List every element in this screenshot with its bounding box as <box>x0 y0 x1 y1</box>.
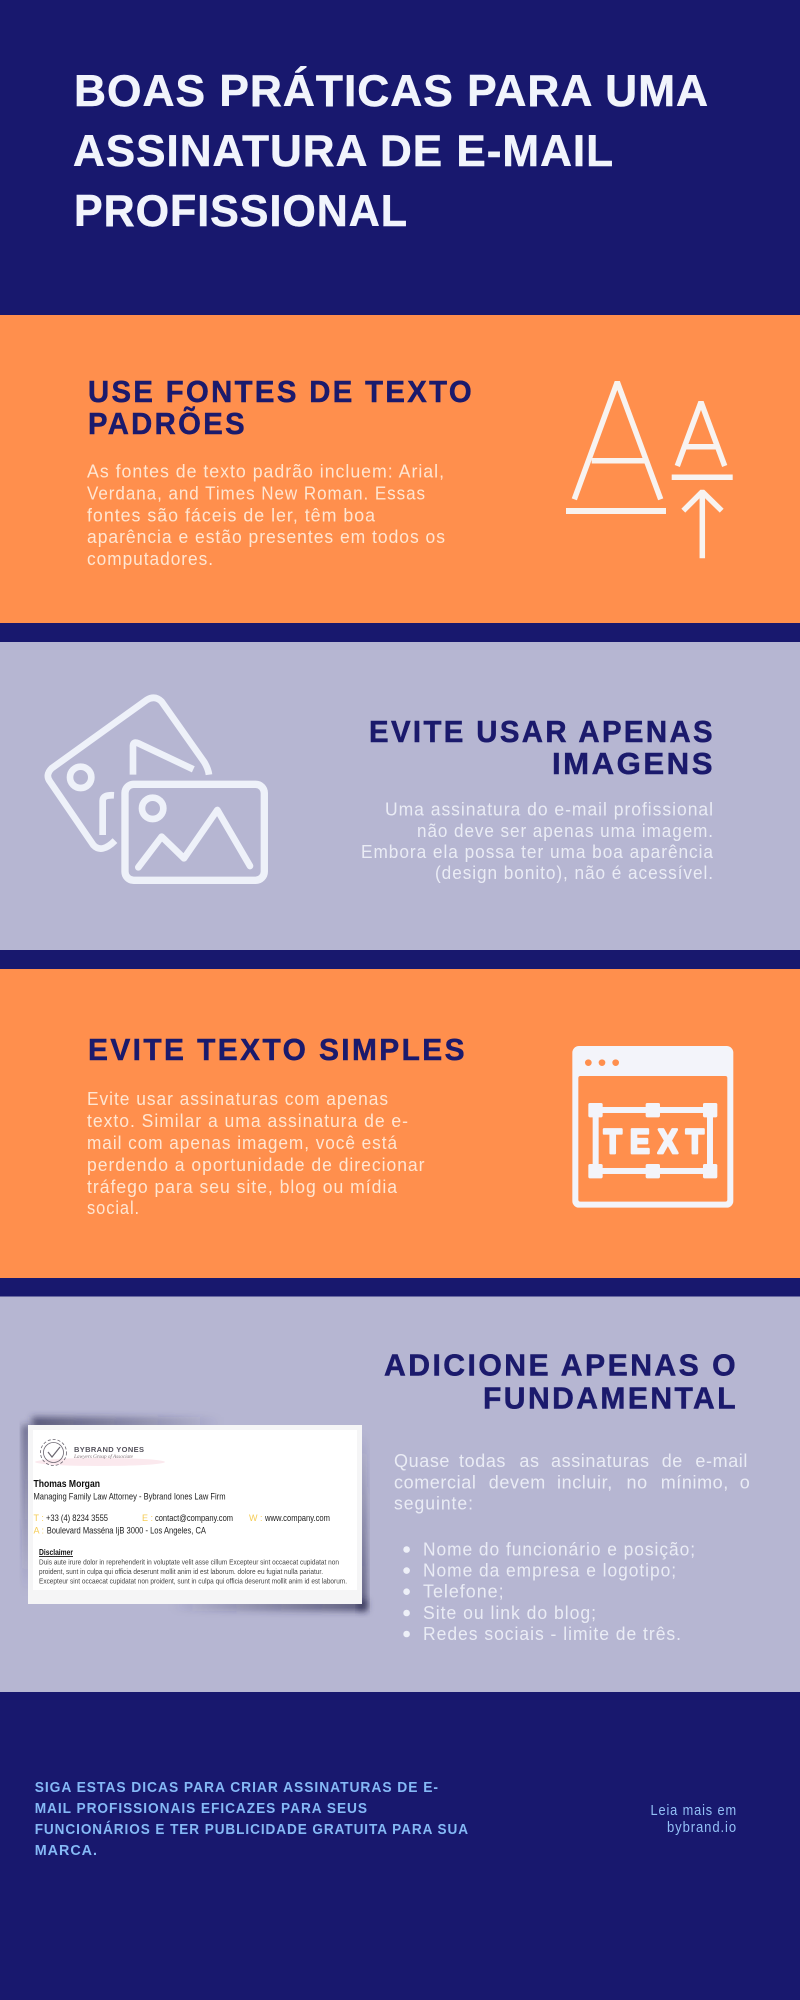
footer call to action: MARCA. <box>35 1843 98 1859</box>
text block: intro fundamental: mínimo, <box>661 1472 735 1492</box>
email signature example: contact@company.com <box>155 1513 233 1523</box>
text block: fontes padrão: computadores. <box>87 549 214 569</box>
text block: fontes padrão: As fontes de texto padrão incluem: Arial, <box>87 462 445 482</box>
email signature example: BYBRAND YONES <box>74 1445 144 1454</box>
icon: text window <box>572 1046 733 1208</box>
icon: pictures <box>48 698 264 880</box>
panel: adicione apenas o fundamental <box>0 1296 800 1692</box>
text block: texto simples: Evite usar assinaturas com apenas <box>87 1089 389 1109</box>
text block: assinatura não deve ser imagem: Uma assinatura do e-mail profissional <box>385 800 714 820</box>
heading: use fontes: USE FONTES DE TEXTO <box>88 374 474 409</box>
email signature example: Thomas Morgan <box>34 1478 100 1490</box>
email signature example: Disclaimer <box>39 1547 74 1557</box>
bullet list: itens fundamentais: Nome do funcionário e posição; <box>423 1540 696 1560</box>
bullet list: itens fundamentais: Nome da empresa e logotipo; <box>423 1561 677 1581</box>
text block: intro fundamental: no <box>626 1472 653 1492</box>
text block: texto simples: perdendo a oportunidade de direcionar <box>87 1155 426 1175</box>
text block: assinatura não deve ser imagem: não deve ser apenas uma imagem. <box>417 821 714 841</box>
heading: use fontes <box>88 374 474 441</box>
text block: intro fundamental: incluir, <box>557 1472 618 1492</box>
text block: texto simples: mail com apenas imagem, você está <box>87 1133 398 1153</box>
text block: fontes padrão <box>87 462 446 569</box>
footer link: leia mais: Leia mais em <box>650 1803 737 1819</box>
footer call to action: FUNCIONÁRIOS E TER PUBLICIDADE GRATUITA PARA SUA <box>35 1821 469 1838</box>
heading: adicione: FUNDAMENTAL <box>483 1380 738 1416</box>
email signature example: W : <box>249 1513 262 1523</box>
text block: intro fundamental: Quase <box>394 1451 456 1471</box>
title: PROFISSIONAL <box>74 187 408 236</box>
email signature example: A : <box>34 1526 44 1536</box>
email signature example: Excepteur sint occaecat cupidatat non proident, sunt in culpa qui officia deserunt mollit anim id est laborum. <box>39 1578 347 1585</box>
title: BOAS PRÁTICAS PARA UMA <box>74 66 709 116</box>
text block: texto simples: social. <box>87 1198 140 1218</box>
text block: intro fundamental: seguinte: <box>394 1494 474 1514</box>
text block: intro fundamental: o <box>740 1472 750 1492</box>
heading: evite imagens: EVITE USAR APENAS <box>369 714 715 749</box>
icon: text window: TEXT <box>604 1123 712 1161</box>
email signature example <box>22 1417 367 1611</box>
email signature example: Boulevard Masséna IjB 3000 - Los Angeles, CA <box>47 1526 206 1536</box>
text block: intro fundamental: de <box>662 1451 689 1471</box>
title: ASSINATURA DE E-MAIL <box>73 127 614 176</box>
title <box>73 66 709 236</box>
icon: font size increase <box>566 382 733 558</box>
heading: use fontes: PADRÕES <box>88 405 247 441</box>
text block: texto simples: tráfego para seu site, blog ou mídia <box>87 1177 398 1197</box>
panel: use fontes de texto padrões <box>0 315 800 623</box>
text block: assinatura não deve ser imagem: (design bonito), não é acessível. <box>435 863 714 883</box>
heading: evite imagens <box>369 714 715 781</box>
text block: fontes padrão: fontes são fáceis de ler, têm boa <box>87 506 376 526</box>
text block: intro fundamental: as <box>519 1451 545 1471</box>
email signature example: proident, sunt in culpa qui officia deserunt mollit anim id est laborum. dolore eu fugiat nulla pariatur. <box>39 1569 323 1576</box>
email signature example: T : <box>34 1513 44 1523</box>
text block: assinatura não deve ser imagem <box>361 800 714 883</box>
email signature example: Lawyers Group of Associate <box>73 1453 134 1460</box>
text block: intro fundamental: todas <box>459 1451 512 1471</box>
text block: fontes padrão: aparência e estão presentes em todos os <box>87 527 446 547</box>
text block: intro fundamental: assinaturas <box>551 1451 655 1471</box>
bullet list: itens fundamentais <box>403 1540 696 1644</box>
text block: fontes padrão: Verdana, and Times New Roman. Essas <box>87 484 426 504</box>
signature logo <box>40 1440 66 1466</box>
email signature example: E : <box>142 1513 153 1523</box>
heading: adicione: ADICIONE APENAS O <box>384 1348 738 1382</box>
bullet list: itens fundamentais: Site ou link do blog; <box>423 1603 597 1623</box>
panel: evite texto simples <box>0 969 800 1278</box>
panel: evite usar apenas imagens <box>0 642 800 950</box>
heading: evite imagens: IMAGENS <box>552 746 715 781</box>
heading: evite texto simples: EVITE TEXTO SIMPLES <box>88 1032 467 1067</box>
footer call to action: MAIL PROFISSIONAIS EFICAZES PARA SEUS <box>35 1801 368 1817</box>
bullet list: itens fundamentais: Telefone; <box>423 1582 505 1602</box>
text block: intro fundamental: devem <box>489 1472 551 1492</box>
text block: texto simples <box>87 1089 426 1218</box>
text block: texto simples: texto. Similar a uma assinatura de e- <box>87 1111 409 1131</box>
footer call to action: SIGA ESTAS DICAS PARA CRIAR ASSINATURAS DE E- <box>35 1780 439 1796</box>
footer call to action <box>35 1780 469 1859</box>
email signature example: Managing Family Law Attorney - Bybrand Iones Law Firm <box>34 1492 226 1502</box>
footer link: leia mais: bybrand.io <box>667 1820 737 1836</box>
text block: intro fundamental: e-mail <box>695 1451 748 1471</box>
bullet list: itens fundamentais: Redes sociais - limite de três. <box>423 1624 682 1644</box>
text block: assinatura não deve ser imagem: Embora ela possa ter uma boa aparência <box>361 842 714 862</box>
email signature example: www.company.com <box>264 1513 330 1523</box>
email signature example: +33 (4) 8234 3555 <box>46 1513 108 1523</box>
heading: adicione <box>384 1348 738 1416</box>
text block: intro fundamental <box>394 1451 750 1514</box>
email signature example: Duis aute irure dolor in reprehenderit in voluptate velit asse cillum Excepteur sint occaecat cupidatat non <box>39 1560 339 1567</box>
footer link: leia mais <box>650 1803 737 1836</box>
text block: intro fundamental: comercial <box>394 1472 482 1492</box>
